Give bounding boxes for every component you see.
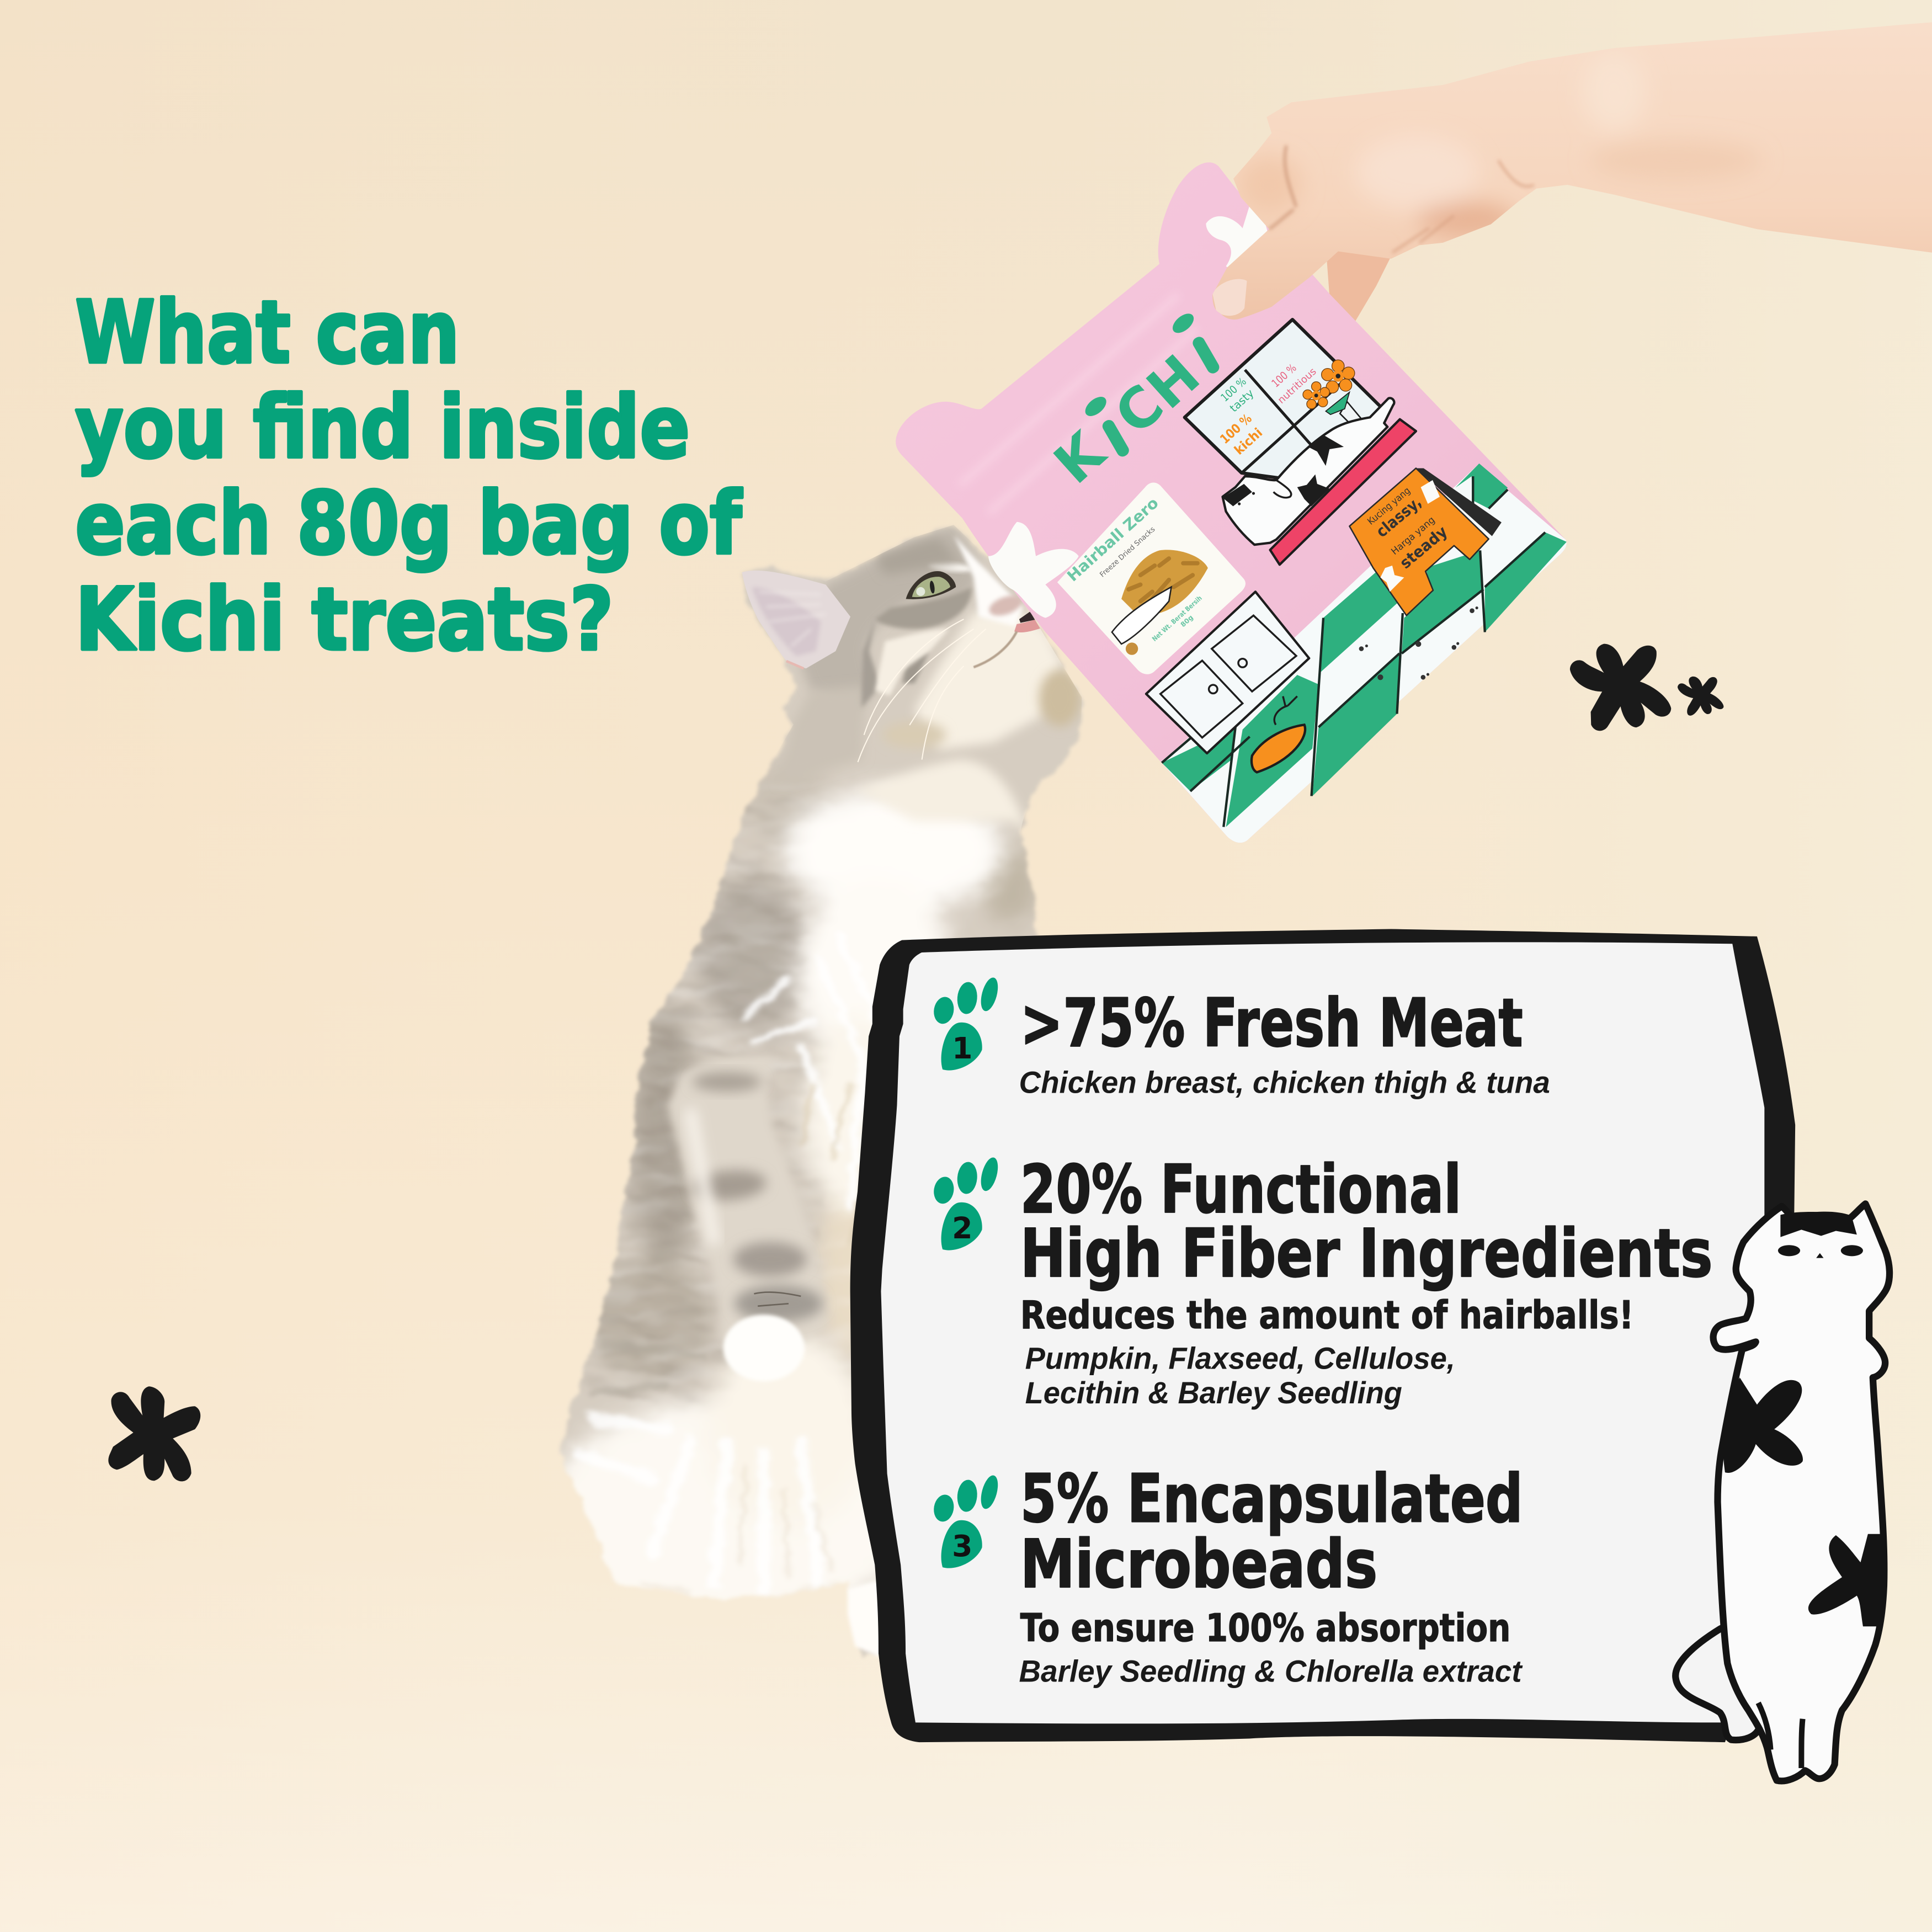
bag shelf [1270,419,1416,565]
detail 2 [1025,1341,1455,1410]
bag label: Freeze Dried Snacks [1098,525,1157,579]
cat eye [906,571,956,599]
heading 3 [1020,1460,1523,1603]
title: each 80g bag of [75,473,743,574]
bag sign: Kucing yang [1365,485,1413,528]
paw icon 2: 2 [952,1211,972,1246]
subheading 3: To ensure 100% absorption [1020,1606,1510,1651]
bag sign: steady [1396,523,1451,572]
bag label: Hairball Zero [1064,494,1162,585]
bag window [1185,320,1384,480]
heading 1: >75% Fresh Meat [1020,985,1523,1062]
cat coat shading [589,757,1037,1377]
photo: second finger behind bag [1326,234,1391,325]
cat fur texture [584,807,815,1402]
bag logo: H [1135,343,1212,422]
bag window: tasty [1227,387,1257,414]
item 3 [932,1460,1523,1689]
paw icon 3 [932,1473,1001,1568]
bag window: kichi [1232,425,1265,458]
cat coat with feathered edge [559,526,1084,1658]
bag window: 100 % [1269,361,1299,390]
bag logo [1042,310,1221,496]
decorative black flower large [1570,644,1671,731]
bag window: 100 % [1218,375,1249,404]
mascot tail [1675,1626,1759,1740]
heading 3: 5% Encapsulated [1020,1460,1523,1537]
decorative black flower small [1678,677,1723,716]
detail 2: Lecithin & Barley Seedling [1025,1375,1402,1410]
bag label: 80g [1179,614,1195,629]
hand shading [1237,53,1762,237]
bag label: Net Wt. Berat Bersih [1151,594,1204,643]
bag sign [1349,468,1502,615]
title: you find inside [75,377,690,477]
heading 2: High Fiber Ingredients [1020,1215,1713,1292]
title [75,282,743,670]
fingernail [1212,279,1247,316]
bag logo: K [1042,418,1118,496]
cat ear [742,571,850,668]
bag floor [1162,464,1567,843]
photo: hand and arm [1195,0,1932,345]
bag zip seal sheen [960,295,1197,513]
panel: ingredients [850,929,1795,1742]
cat white fluff over texture [542,789,1004,1632]
subheading 2: Reduces the amount of hairballs! [1020,1294,1634,1338]
detail 3: Barley Seedling & Chlorella extract [1019,1654,1523,1689]
item 2 [932,1151,1713,1410]
panel paper [881,942,1764,1723]
bag sign: Harga yang [1390,515,1437,557]
bag logo: C [1103,372,1176,447]
heading 3: Microbeads [1020,1526,1377,1603]
detail 2: Pumpkin, Flaxseed, Cellulose, [1025,1341,1455,1376]
mascot black patch 1 [1723,1377,1803,1473]
cat foot [848,1577,887,1657]
cat whiskers [858,619,986,762]
cat forearm [668,1056,826,1381]
heading 2 [1020,1151,1713,1292]
mascot black patch 2 [1808,1534,1883,1626]
bag sign: classy, [1372,493,1425,541]
paw icon 2 [932,1156,1001,1250]
photo: fluffy grey cat [559,525,1084,1658]
detail 1: Chicken breast, chicken thigh & tuna [1019,1065,1550,1099]
heading 2: 20% Functional [1020,1151,1461,1228]
cat nose and mouth [973,592,1045,667]
mascot body [1713,1204,1890,1781]
item 1 [932,976,1550,1099]
bag cat illustration [1223,398,1394,545]
cat chest fluff [739,973,867,1243]
mascot: illustrated cat [1675,1204,1890,1781]
bag flowers [1303,360,1371,435]
paw icon 3: 3 [952,1529,972,1563]
paw icon 1 [932,976,1001,1071]
bag white flower marks [988,198,1440,618]
mascot legs line [1758,1703,1803,1768]
product bag [896,162,1567,843]
decorative black flower left [108,1386,200,1481]
cat lower fluff strands [579,1343,838,1598]
bag bowl [1252,696,1305,772]
bag paw prints [1359,606,1478,680]
paw icon 1: 1 [952,1031,972,1066]
cat white paw [723,1314,805,1381]
mascot bangs [1780,1212,1857,1237]
panel frame [850,929,1795,1742]
bag body [896,162,1567,843]
title: Kichi treats? [75,570,614,670]
bag cabinet [1146,592,1309,753]
mascot eyes [1778,1245,1863,1258]
bag label [1057,482,1246,674]
bag window: 100 % [1217,411,1255,447]
title: What can [75,282,460,382]
bag window: nutritious [1276,366,1319,406]
cat head [742,525,1081,833]
